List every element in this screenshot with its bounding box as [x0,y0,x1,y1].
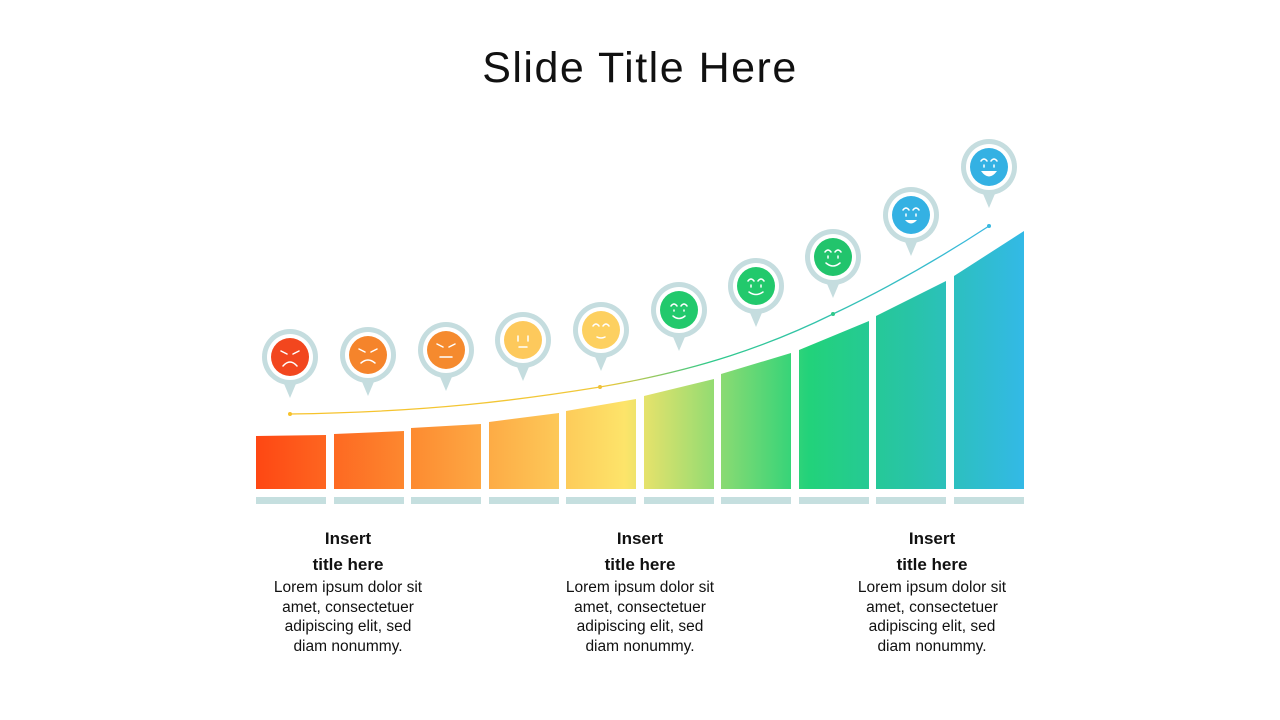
pin 3: annoyed [418,322,474,391]
pin 9: happy [883,187,939,256]
text block 2: title here [605,555,675,574]
pin 4: neutral [495,312,551,381]
pin 1: angry [262,329,318,398]
bars [256,231,1024,489]
text block 1: Insert [325,529,371,548]
text block 1: Lorem ipsum dolor sit amet, consectetuer adipiscing elit, sed diam nonummy. [274,579,422,654]
text block 2: Insert [617,529,663,548]
base strips [256,497,1024,504]
pin 5: slight smile [573,302,629,371]
text block 2 [566,529,714,654]
pin 8: smile [805,229,861,298]
text block 1: title here [313,555,383,574]
trend line [288,224,991,416]
text block 2: Lorem ipsum dolor sit amet, consectetuer adipiscing elit, sed diam nonummy. [566,579,714,654]
title: Slide Title Here [482,44,798,92]
pin 6: smile [651,282,707,351]
text block 3 [858,529,1006,654]
text block 3: Lorem ipsum dolor sit amet, consectetuer adipiscing elit, sed diam nonummy. [858,579,1006,654]
pin 2: angry [340,327,396,396]
text block 1 [274,529,422,654]
text block 3: Insert [909,529,955,548]
pins [262,139,1017,398]
pin 10: very happy [961,139,1017,208]
text block 3: title here [897,555,967,574]
pin 7: smile [728,258,784,327]
